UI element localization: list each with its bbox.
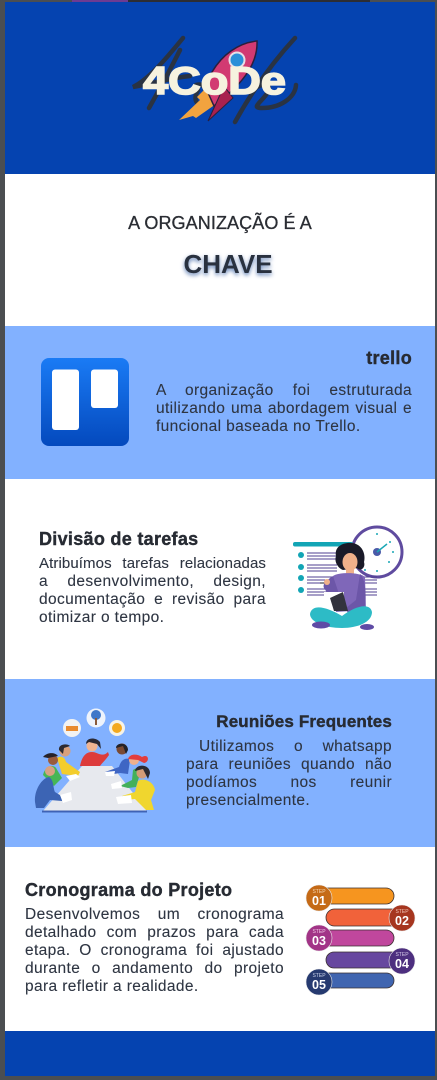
text: divisão description: Atribuímos tarefas relacionadas (39, 555, 266, 572)
step 05: STEP (312, 973, 326, 979)
step 01: STEP (312, 889, 326, 895)
wordmark: 4CoDe (143, 60, 286, 103)
text: cronograma description (25, 906, 284, 995)
script scrawl (133, 38, 296, 122)
illustration: woman with checklist and clock (293, 526, 404, 630)
heading: a organização é a: A ORGANIZAÇÃO É A (128, 213, 312, 233)
heading: reuniões frequentes: Reuniões Frequentes (216, 712, 392, 731)
woman (310, 543, 374, 630)
rocket flame (179, 85, 216, 120)
panel: intro (5, 174, 435, 326)
step 05: 05 (312, 978, 326, 992)
step 02: STEP (395, 909, 409, 915)
text: trello description: utilizando uma abordagem visual e (156, 400, 412, 417)
panel: cronograma do projeto (5, 847, 435, 1031)
checklist (293, 542, 377, 595)
text: divisão description: otimizar o tempo. (39, 609, 164, 626)
heading: chave: CHAVE (183, 249, 273, 279)
text: trello description: funcional baseada no Trello. (156, 418, 361, 435)
panel: header (5, 2, 435, 174)
table (43, 766, 147, 811)
rocket window (230, 52, 244, 68)
step 05 (306, 969, 394, 995)
step 03 (306, 925, 394, 951)
text: reuniões description: Utilizamos o whatsapp (199, 738, 392, 755)
footer band (5, 1031, 435, 1076)
icon: trello (41, 358, 129, 446)
text: reuniões description: para reuniões quando não (186, 756, 392, 773)
heading: trello: trello (366, 348, 412, 368)
step 03: 03 (312, 934, 326, 948)
panel: trello (5, 326, 435, 479)
step 04: 04 (395, 957, 409, 971)
top edge accent (72, 0, 128, 2)
step 04 (326, 948, 415, 974)
heading: divisão de tarefas: Divisão de tarefas (39, 529, 198, 549)
step 03: STEP (312, 929, 326, 935)
clock (352, 527, 402, 577)
text: trello description (156, 382, 412, 435)
step 02: 02 (395, 914, 409, 928)
logo: 4CoDe rocket and wordmark (132, 36, 298, 124)
text: reuniões description: presencialmente. (186, 792, 310, 809)
step 04: STEP (395, 952, 409, 958)
papers (60, 771, 132, 804)
chart: five steps timeline (306, 884, 416, 996)
top edge strip (128, 0, 370, 2)
step 01 (306, 885, 394, 911)
thought bubbles (63, 708, 125, 737)
panel: divisão de tarefas (5, 479, 435, 679)
text: cronograma description: para refletir a realidade. (25, 978, 199, 995)
text: divisão description: a desenvolvimento, design, (39, 573, 266, 590)
text: cronograma description: etapa. O cronograma foi ajustado (25, 942, 284, 959)
text: divisão description (39, 555, 266, 626)
text: reuniões description (186, 738, 392, 809)
text: trello description: A organização foi estruturada (156, 382, 412, 399)
step 02 (326, 905, 415, 931)
text: cronograma description: Desenvolvemos um cronograma (25, 906, 284, 923)
heading: cronograma do projeto: Cronograma do Projeto (25, 880, 232, 900)
people (35, 738, 155, 810)
panel: reuniões frequentes (5, 679, 435, 847)
illustration: meeting around table (34, 708, 155, 812)
rocket body (205, 41, 257, 106)
text: reuniões description: podíamos nos reunir (186, 774, 392, 791)
text: cronograma description: detalhado com prazos para cada (25, 924, 284, 941)
text: divisão description: documentação e revisão para (39, 591, 266, 608)
text: cronograma description: durante o andamento do projeto (25, 960, 284, 977)
step 01: 01 (312, 894, 326, 908)
